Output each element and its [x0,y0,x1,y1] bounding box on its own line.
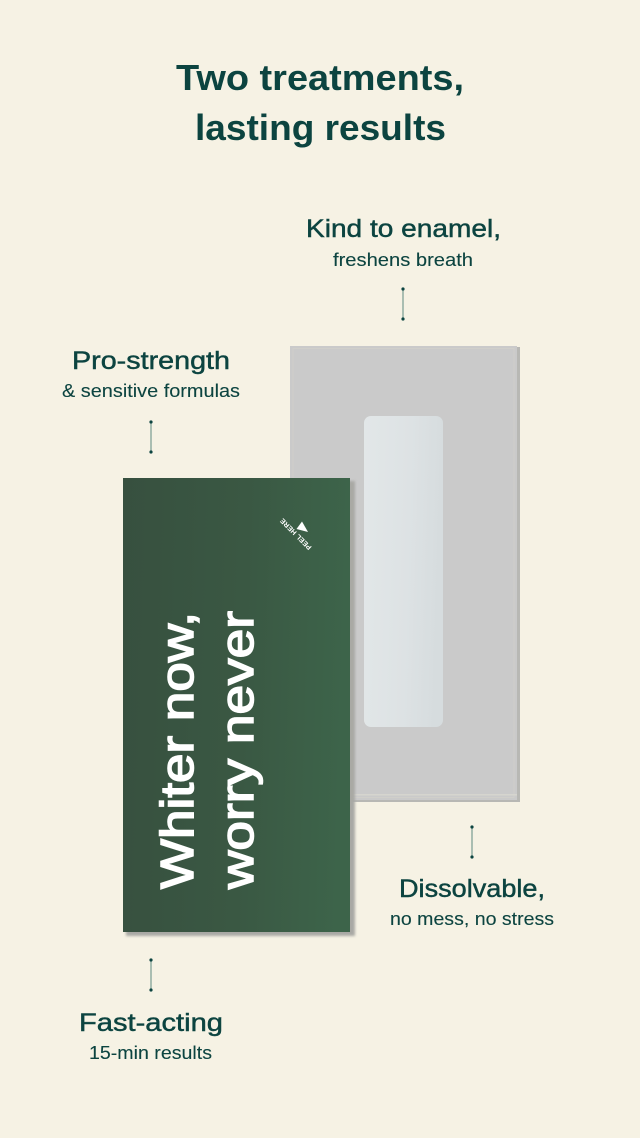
callout: pro-strength [62,347,240,401]
title: Two treatments, [176,57,464,98]
pack slogan [151,611,263,890]
title [176,57,464,148]
callout: kind to enamel: Kind to enamel, [306,215,501,243]
callout: dissolvable [390,875,554,929]
front of strip pack [123,478,355,936]
callout: fast-acting [79,1009,223,1063]
connector: kind to enamel [401,287,405,321]
peel here marker: PEEL HERE [279,516,313,551]
pack slogan: Whiter now, [151,612,203,889]
callout: pro-strength: & sensitive formulas [62,381,240,401]
callout: fast-acting: Fast-acting [79,1009,223,1037]
strip window [364,416,443,727]
callout: dissolvable: no mess, no stress [390,909,554,929]
pack slogan: worry never [211,611,263,890]
callout: fast-acting: 15-min results [89,1043,212,1063]
back of strip pack [290,346,520,802]
connector: dissolvable [470,825,474,859]
title: lasting results [195,107,446,148]
connector: fast-acting [149,958,153,992]
callout: kind to enamel: freshens breath [333,250,473,270]
callout: kind to enamel [306,215,501,270]
callout: dissolvable: Dissolvable, [399,875,545,903]
connector: pro-strength [149,420,153,454]
callout: pro-strength: Pro-strength [72,347,230,375]
